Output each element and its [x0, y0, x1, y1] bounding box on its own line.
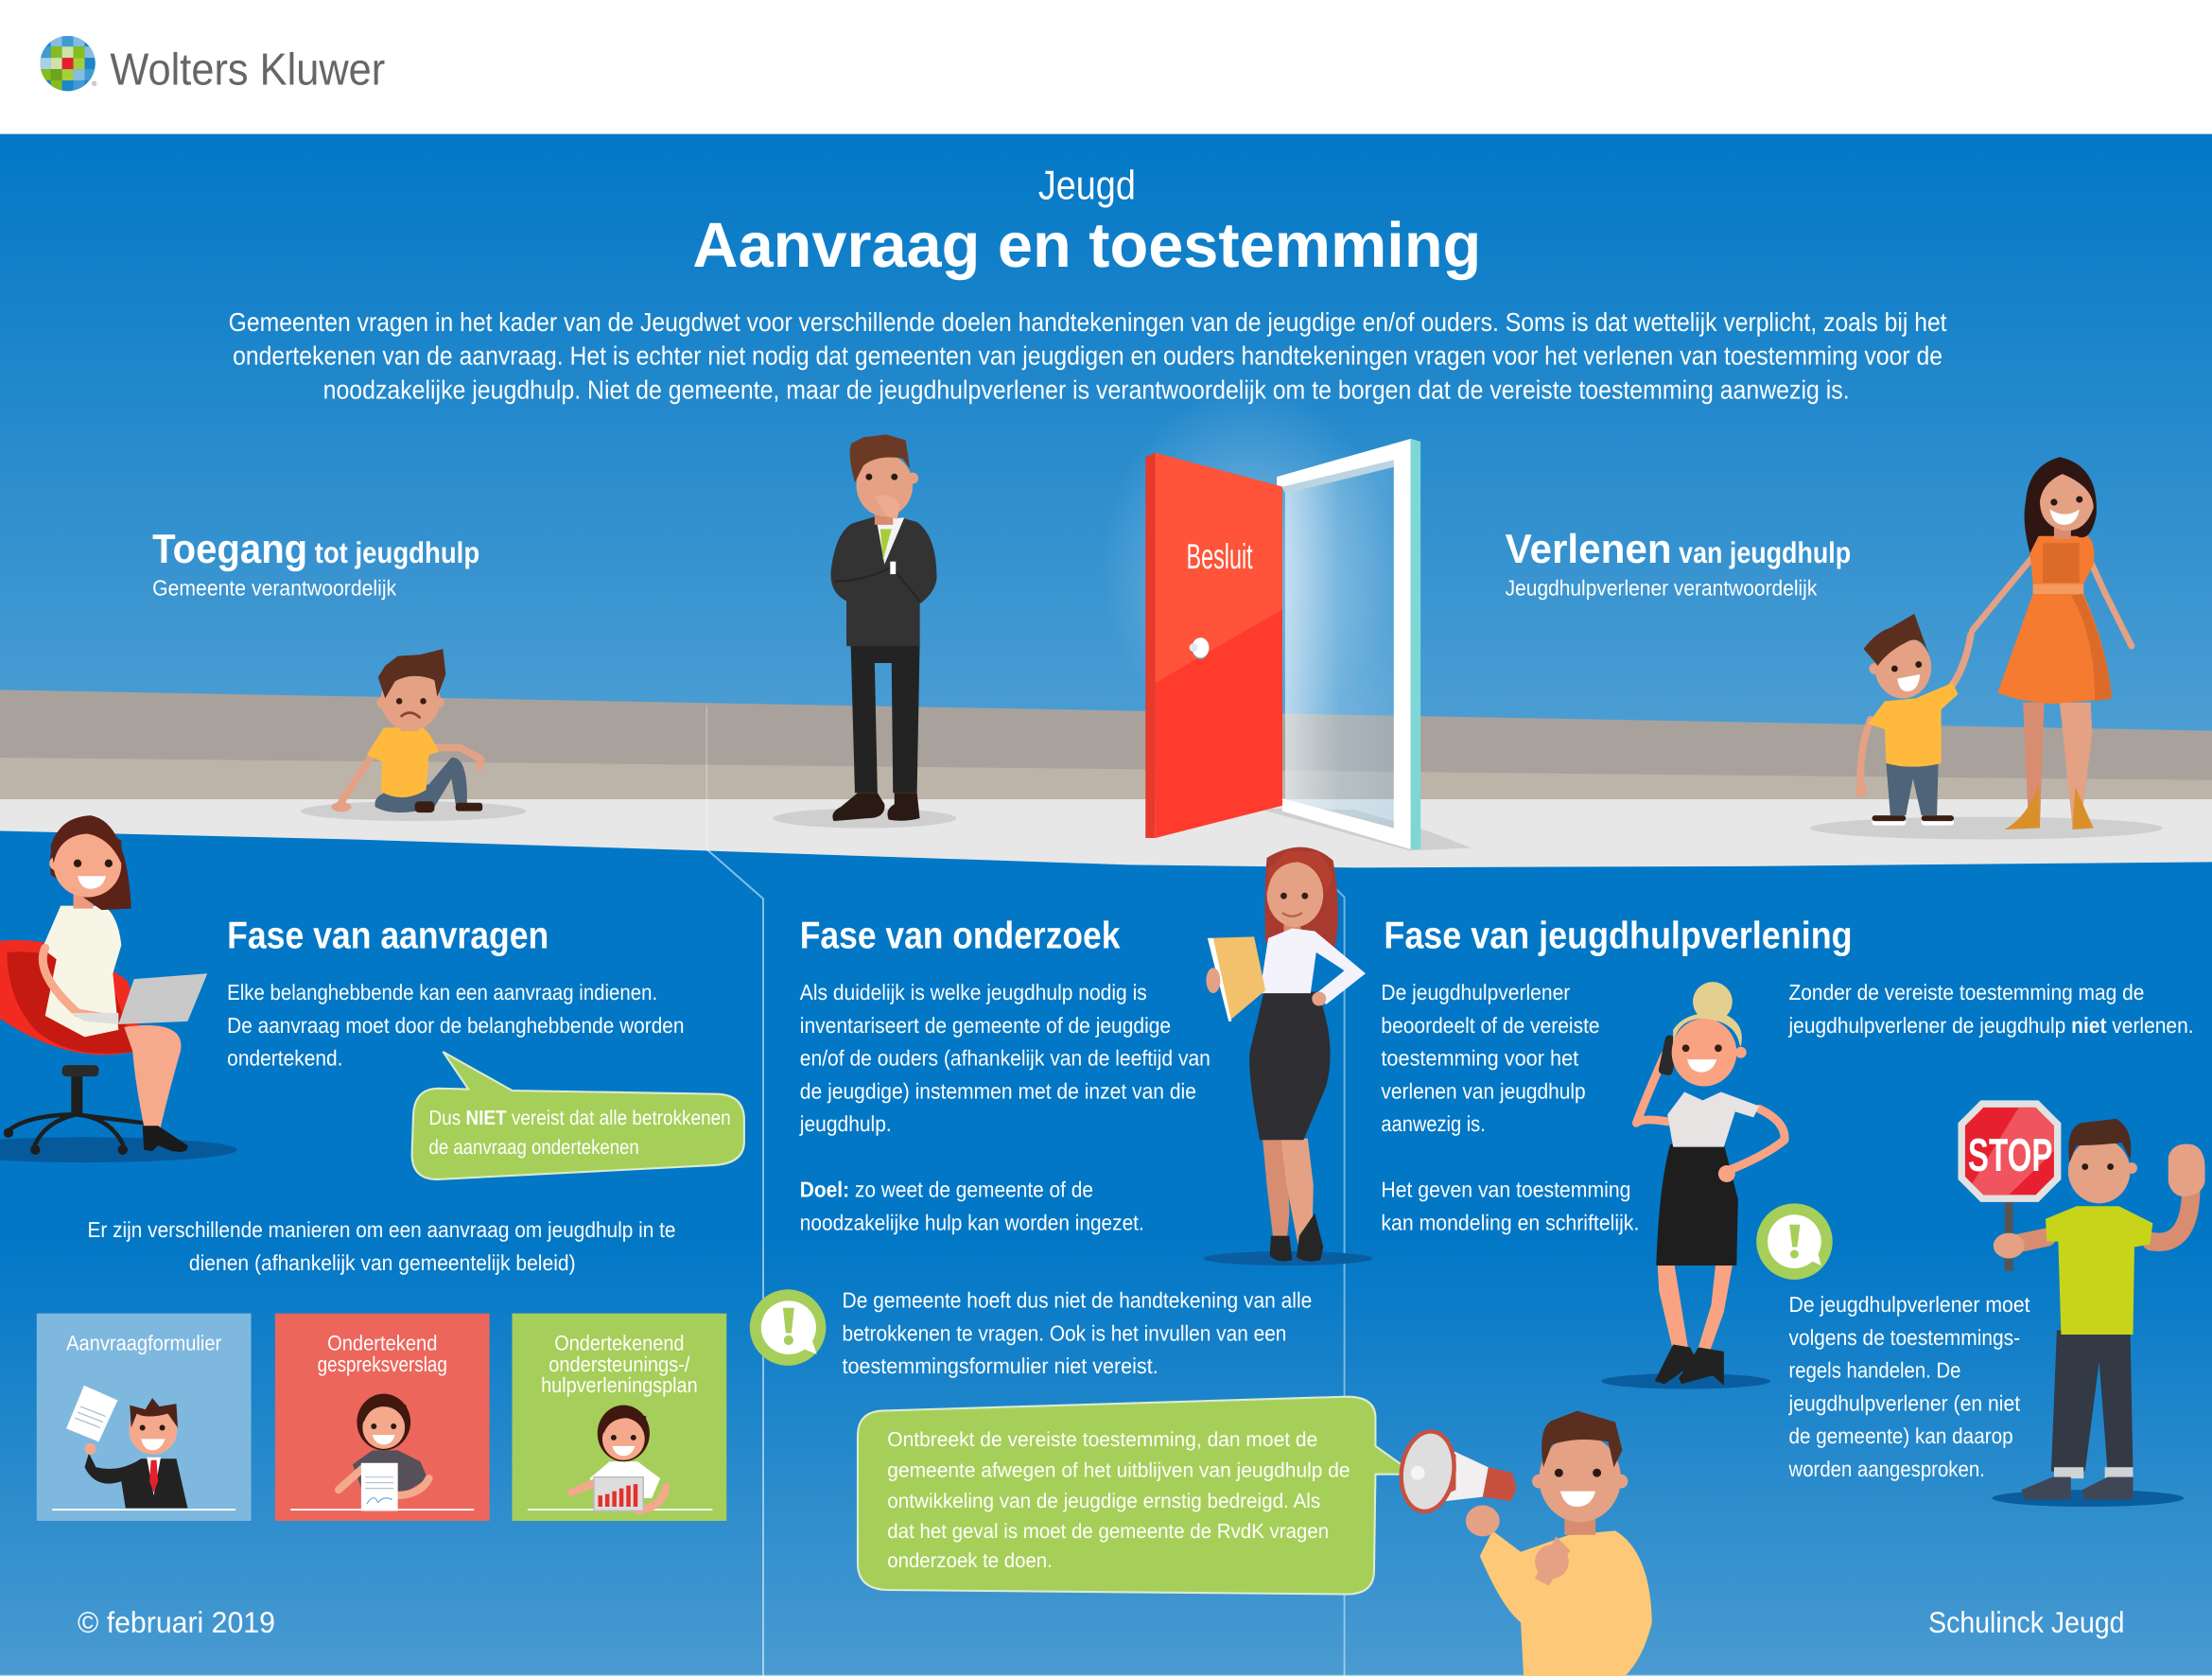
card: Ondertekenend plan: ondersteunings-/ — [549, 1353, 691, 1377]
body text left column: kan mondeling en schriftelijk. — [1381, 1212, 1639, 1235]
header band — [0, 0, 2212, 134]
body text: Elke belanghebbende kan een aanvraag indienen. — [227, 982, 657, 1005]
body text: Als duidelijk is welke jeugdhulp nodig is — [800, 982, 1147, 1005]
card: Ondertekenend plan: hulpverleningsplan — [541, 1374, 698, 1398]
body text left column: De jeugdhulpverlener — [1381, 982, 1570, 1005]
character: man with megaphone — [1394, 1411, 1652, 1676]
footer: Schulinck Jeugd: Schulinck Jeugd — [1928, 1607, 2125, 1639]
note text — [843, 1289, 1312, 1379]
card: Aanvraagformulier — [37, 1314, 252, 1521]
floor — [0, 799, 2212, 882]
card: Ondertekend gespreksverslag — [275, 1314, 490, 1521]
note text: worden aangesproken. — [1787, 1458, 1985, 1482]
note text: betrokkenen te vragen. Ook is het invullen van een — [843, 1322, 1286, 1346]
card: Ondertekend gespreksverslag: Ondertekend — [327, 1332, 437, 1355]
body text: Doel: zo weet de gemeente of de — [800, 1178, 1093, 1203]
intro text — [229, 306, 1947, 404]
callout: ontbrekende toestemming: dat het geval is moet de gemeente de RvdK vragen — [887, 1521, 1329, 1544]
text: manieren: dienen (afhankelijk van gemeentelijk beleid) — [189, 1251, 576, 1276]
body text — [227, 982, 684, 1072]
note text: volgens de toestemmings- — [1788, 1327, 2020, 1351]
heading: Toegang tot jeugdhulp: Toegang — [152, 528, 307, 573]
logo: Wolters Kluwer — [40, 35, 386, 95]
callout: ontbrekende toestemming: gemeente afwegen of het uitblijven van jeugdhulp de — [887, 1460, 1350, 1483]
heading: Verlenen van jeugdhulp: Verlenen — [1506, 528, 1672, 573]
heading: Verlenen van jeugdhulp: Jeugdhulpverlener verantwoordelijk — [1506, 577, 1818, 601]
body text left column: Het geven van toestemming — [1381, 1178, 1630, 1203]
character: sad boy on the floor — [301, 649, 526, 821]
note text: De jeugdhulpverlener moet — [1788, 1294, 2031, 1318]
character: woman with folder — [1203, 847, 1372, 1266]
wall lower band — [0, 758, 2212, 804]
callout: ontbrekende toestemming: ontwikkeling van de jeugdige ernstig bedreigd. Als — [887, 1491, 1320, 1513]
body text: jeugdhulp. — [798, 1113, 892, 1137]
note text: jeugdhulpverlener (en niet — [1787, 1392, 2021, 1416]
panel: Fase van aanvragen — [37, 915, 744, 1521]
body text: noodzakelijke hulp kan worden ingezet. — [800, 1212, 1144, 1235]
body text left column: toestemming voor het — [1381, 1047, 1579, 1072]
door label: Besluit — [1187, 537, 1253, 577]
subtitle: Jeugd — [1038, 164, 1136, 209]
character: blonde woman on the phone — [1601, 982, 1785, 1388]
card: Aanvraagformulier: Aanvraagformulier — [66, 1332, 221, 1355]
heading: Verlenen van jeugdhulp: van jeugdhulp — [1679, 537, 1851, 570]
body text: inventariseert de gemeente of de jeugdige — [800, 1014, 1171, 1039]
heading: Fase van aanvragen — [227, 915, 549, 956]
callout: ontbrekende toestemming: onderzoek te doen. — [887, 1550, 1053, 1573]
note text: De gemeente hoeft dus niet de handtekening van alle — [843, 1289, 1312, 1314]
intro text: noodzakelijke jeugdhulp. Niet de gemeente, maar de jeugdhulpverlener is verantwoordelijk om te borgen dat de vereiste toestemming aanwezig is. — [323, 375, 1850, 404]
logo: Wolters Kluwer: Wolters Kluwer — [110, 44, 386, 95]
heading: Toegang tot jeugdhulp: Gemeente verantwoordelijk — [152, 577, 397, 601]
heading: Verlenen van jeugdhulp — [1506, 528, 1851, 601]
character: mother and son holding hands — [1810, 457, 2163, 839]
icon: exclamation speech bubble — [1756, 1203, 1833, 1280]
body text right column: jeugdhulpverlener de jeugdhulp niet verlenen. — [1787, 1014, 2194, 1039]
note text: de gemeente) kan daarop — [1788, 1425, 2013, 1449]
stop sign: STOP — [1968, 1128, 2052, 1180]
callout: ontbrekende toestemming — [858, 1397, 1415, 1594]
card: Ondertekenend plan — [512, 1314, 726, 1521]
callout: ontbrekende toestemming: Ontbreekt de vereiste toestemming, dan moet de — [887, 1429, 1317, 1452]
main title: Aanvraag en toestemming — [692, 209, 1481, 281]
heading: Toegang tot jeugdhulp — [152, 528, 479, 601]
door knob — [1190, 637, 1209, 659]
text: manieren — [87, 1219, 676, 1276]
body text right column: Zonder de vereiste toestemming mag de — [1788, 982, 2144, 1005]
callout: niet vereist — [412, 1052, 744, 1179]
illustration: red door with frame — [1145, 439, 1472, 850]
card: Ondertekend gespreksverslag: gespreksverslag — [318, 1353, 447, 1377]
body text: De aanvraag moet door de belanghebbende worden — [227, 1014, 684, 1039]
heading: Fase van jeugdhulpverlening — [1384, 915, 1853, 956]
panel: Fase van onderzoek — [750, 915, 1415, 1594]
heading: Toegang tot jeugdhulp: tot jeugdhulp — [315, 537, 479, 570]
bottom edge line — [0, 1675, 2212, 1676]
note text: toestemmingsformulier niet vereist. — [843, 1355, 1158, 1379]
body text right column — [1787, 982, 2194, 1039]
body text: en/of de ouders (afhankelijk van de leeftijd van — [800, 1047, 1211, 1072]
panel: Fase van jeugdhulpverlening — [1381, 915, 2194, 1482]
icon: exclamation speech bubble — [750, 1289, 826, 1366]
callout: niet vereist: de aanvraag ondertekenen — [428, 1137, 639, 1160]
lower blue panel — [0, 831, 2212, 1676]
footer: date: © februari 2019 — [78, 1607, 275, 1639]
stop sign — [1958, 1100, 2061, 1202]
card: Ondertekenend plan: Ondertekenend — [554, 1332, 684, 1355]
text: manieren: Er zijn verschillende manieren om een aanvraag om jeugdhulp in te — [87, 1219, 676, 1243]
character: man with STOP sign — [1958, 1100, 2205, 1507]
character: thinking man in suit — [773, 434, 956, 829]
note text — [1787, 1294, 2031, 1482]
body text left column: verlenen van jeugdhulp — [1381, 1080, 1586, 1104]
callout: niet vereist: Dus NIET vereist dat alle betrokkenen — [428, 1108, 731, 1130]
body text: ondertekend. — [227, 1047, 342, 1072]
intro text: ondertekenen van de aanvraag. Het is echter niet nodig dat gemeenten van jeugdigen en ouders handtekeningen vragen voor het verlenen van toestemming voor de — [233, 340, 1942, 371]
body text left column: aanwezig is. — [1381, 1113, 1486, 1137]
body text left column: beoordeelt of de vereiste — [1381, 1014, 1600, 1039]
megaphone — [1394, 1425, 1517, 1517]
intro text: Gemeenten vragen in het kader van de Jeugdwet voor verschillende doelen handtekeningen van de jeugdige en/of ouders. Soms is dat wettelijk verplicht, zoals bij het — [229, 306, 1947, 337]
body text left column — [1381, 982, 1639, 1235]
door glow — [1101, 388, 1397, 741]
body text: de jeugdige) instemmen met de inzet van die — [800, 1080, 1196, 1104]
heading: Fase van onderzoek — [800, 915, 1122, 956]
note text: regels handelen. De — [1788, 1359, 1960, 1384]
logo: Wolters Kluwer: ® — [92, 80, 97, 89]
body text — [798, 982, 1211, 1235]
character: woman on red chair with laptop — [0, 815, 237, 1162]
sky background — [0, 134, 2212, 839]
wall upper band — [0, 690, 2212, 790]
